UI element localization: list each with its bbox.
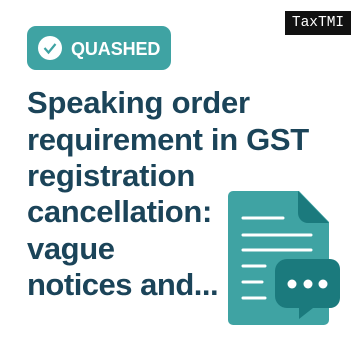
badge label: QUASHED: [71, 39, 160, 59]
title: cancellation:: [27, 194, 212, 229]
title: notices and...: [27, 267, 218, 302]
icon: check circle: [38, 36, 62, 60]
document page: [228, 191, 329, 325]
title: registration: [27, 158, 195, 193]
speech bubble: [275, 259, 340, 319]
badge: quashed: [27, 26, 171, 70]
icon: document with speech bubble: [228, 191, 340, 325]
title: requirement in GST: [27, 122, 309, 157]
title: [27, 85, 309, 302]
title: Speaking order: [27, 85, 250, 120]
logo: TaxTMI: TaxTMI: [292, 15, 344, 31]
document text lines: [243, 218, 311, 298]
title: vague: [27, 231, 115, 266]
document fold: [298, 191, 329, 223]
logo: TaxTMI: [285, 11, 351, 35]
